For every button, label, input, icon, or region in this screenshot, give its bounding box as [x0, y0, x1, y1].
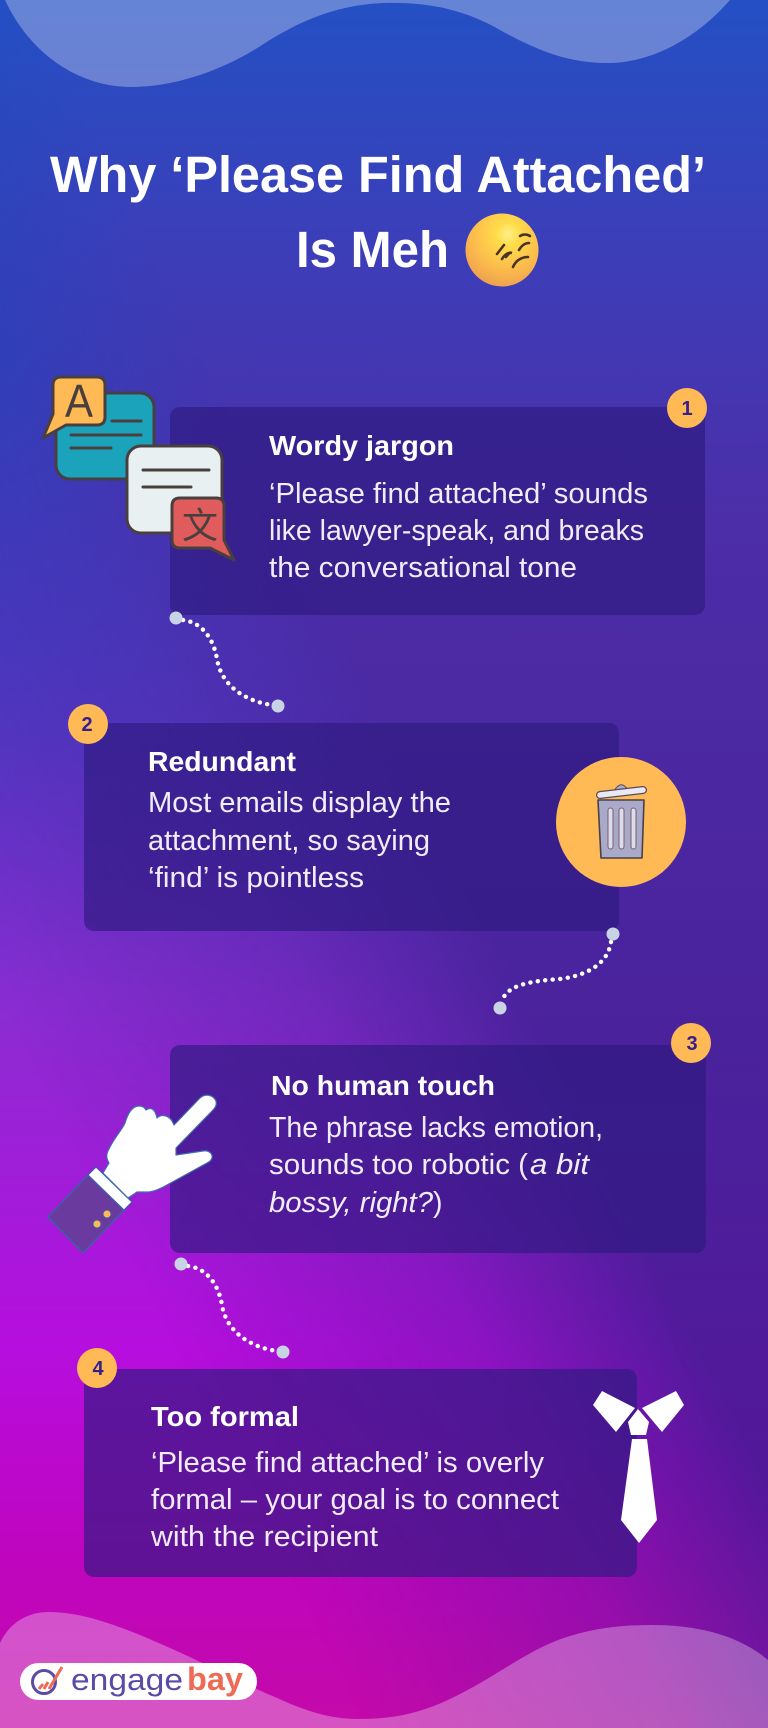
text: redundant body: ‘find’ is pointless	[148, 862, 364, 894]
text: no human touch body: bossy, right?	[269, 1187, 433, 1219]
text: redundant body	[148, 787, 451, 894]
text: no human touch body: sounds too robotic (	[269, 1149, 529, 1181]
badge 2: 2	[81, 714, 93, 736]
badge 3	[671, 1023, 711, 1063]
icon: unamused emoji	[466, 214, 538, 286]
logo mark	[32, 1667, 62, 1694]
title: Is Meh	[296, 221, 449, 278]
text: no human touch body: The phrase lacks emotion,	[269, 1112, 603, 1144]
icon: translation speech bubbles	[43, 375, 234, 560]
logo: engagebay: bay	[187, 1661, 243, 1697]
text: too formal body: with the recipient	[150, 1521, 378, 1553]
icon: translation speech bubbles: A	[65, 375, 93, 427]
title	[50, 146, 706, 278]
text: wordy jargon body: ‘Please find attached’ sounds	[269, 478, 648, 510]
heading: no human touch: No human touch	[271, 1070, 495, 1101]
text: too formal body: ‘Please find attached’ is overly	[151, 1447, 545, 1479]
text: redundant body: Most emails display the	[148, 787, 451, 819]
icon: translation speech bubbles: 文	[182, 497, 218, 549]
title: Why ‘Please Find Attached’	[50, 146, 706, 203]
icon: necktie	[593, 1391, 684, 1543]
panel: no human touch	[170, 1023, 711, 1253]
icon: trash can	[556, 757, 686, 887]
logo: engagebay: engage	[71, 1662, 183, 1697]
text: redundant body: attachment, so saying	[148, 825, 430, 857]
text: no human touch body	[269, 1112, 603, 1219]
panel: redundant	[68, 704, 619, 931]
logo: engagebay	[20, 1661, 257, 1700]
badge 2	[68, 704, 108, 744]
connector: 1 to 2	[170, 612, 284, 712]
panel: too formal	[77, 1348, 637, 1577]
panel: wordy jargon	[170, 388, 707, 615]
text: wordy jargon body: like lawyer-speak, and breaks	[269, 515, 644, 547]
heading: too formal: Too formal	[151, 1401, 299, 1432]
badge 1	[667, 388, 707, 428]
text: too formal body: formal – your goal is to connect	[151, 1484, 559, 1516]
badge 4: 4	[92, 1358, 104, 1380]
bottom wave decoration	[0, 1612, 768, 1728]
top wave decoration	[5, 0, 730, 87]
badge 3: 3	[686, 1033, 698, 1055]
text: wordy jargon body: the conversational tone	[269, 552, 577, 584]
connector: 2 to 3	[494, 928, 620, 1014]
heading: redundant: Redundant	[148, 746, 296, 777]
connector: 3 to 4	[174, 1258, 290, 1358]
heading: wordy jargon: Wordy jargon	[269, 430, 454, 461]
text: too formal body	[150, 1447, 559, 1553]
icon: pointing hand	[48, 1095, 216, 1253]
text: no human touch body: )	[433, 1187, 442, 1219]
badge 4	[77, 1348, 117, 1388]
text: no human touch body: a bit	[530, 1149, 590, 1181]
text: wordy jargon body	[269, 478, 648, 584]
badge 1: 1	[681, 398, 693, 420]
